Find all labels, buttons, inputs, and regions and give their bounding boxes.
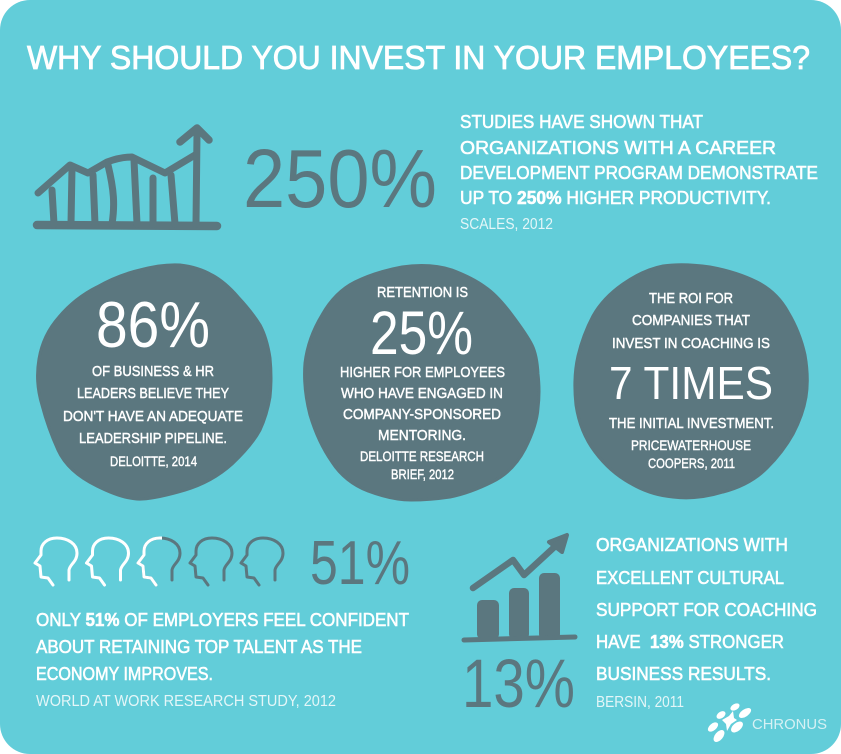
panel: 25% circle: HIGHER FOR EMPLOYEES	[340, 364, 505, 381]
text block: retaining top talent: WORLD AT WORK RESEARCH STUDY, 2012	[36, 693, 336, 710]
icon: five heads, 51% filled white	[35, 538, 283, 585]
panel: 7 times circle: PRICEWATERHOUSE	[631, 438, 751, 453]
text block: cultural support for coaching	[596, 535, 817, 711]
text block: cultural support for coaching: EXCELLENT CULTURAL	[596, 568, 784, 588]
panel: 7 times circle: THE ROI FOR	[649, 290, 733, 307]
logo: Chronus	[706, 702, 827, 744]
text block: cultural support for coaching: BUSINESS RESULTS.	[596, 664, 771, 684]
panel: 86% circle: DON'T HAVE AN ADEQUATE	[63, 408, 243, 425]
text block: cultural support for coaching: ORGANIZATIONS WITH	[596, 535, 788, 555]
title: WHY SHOULD YOU INVEST IN YOUR EMPLOYEES?	[27, 39, 810, 76]
panel: 86% circle	[38, 265, 271, 499]
text block: career development productivity: ORGANIZATIONS WITH A CAREER	[460, 138, 776, 158]
logo: Chronus: CHRONUS	[752, 716, 827, 733]
text block: cultural support for coaching: SUPPORT FOR COACHING	[596, 600, 817, 620]
text block: retaining top talent: ONLY 51% OF EMPLOYERS FEEL CONFIDENT	[36, 610, 409, 630]
panel: 7 times circle: COMPANIES THAT	[632, 312, 750, 329]
panel: 7 times circle: COOPERS, 2011	[648, 456, 735, 471]
text block: career development productivity: SCALES, 2012	[460, 216, 553, 233]
panel: 25% circle: WHO HAVE ENGAGED IN	[341, 385, 503, 402]
text block: career development productivity: STUDIES HAVE SHOWN THAT	[460, 112, 703, 132]
text block: retaining top talent: ECONOMY IMPROVES.	[36, 664, 213, 684]
text block: cultural support for coaching: BERSIN, 2011	[596, 694, 684, 711]
text block: cultural support for coaching: HAVE 13% STRONGER	[596, 632, 784, 652]
panel: 7 times circle: THE INITIAL INVESTMENT.	[609, 415, 774, 432]
panel: 25% circle: COMPANY-SPONSORED	[343, 406, 501, 423]
panel: 25% circle: DELOITTE RESEARCH	[360, 449, 484, 464]
panel: 86% circle: LEADERSHIP PIPELINE.	[79, 430, 227, 447]
stat: 250%: 250%	[243, 132, 437, 225]
panel: 7 times circle: INVEST IN COACHING IS	[612, 335, 770, 352]
text block: career development productivity: UP TO 250% HIGHER PRODUCTIVITY.	[460, 188, 771, 208]
text block: career development productivity: DEVELOPMENT PROGRAM DEMONSTRATE	[460, 163, 818, 183]
panel: 25% circle	[305, 266, 539, 500]
panel: 86% circle: DELOITTE, 2014	[110, 454, 197, 469]
panel: 7 times circle: 7 TIMES	[609, 357, 773, 409]
icon: bar chart with arrow	[464, 535, 575, 640]
stat: 51%: 51%	[310, 529, 410, 598]
panel: 25% circle: MENTORING.	[378, 427, 466, 444]
icon: rising line chart with arrow	[37, 128, 217, 226]
text block: retaining top talent: ABOUT RETAINING TOP TALENT AS THE	[36, 637, 362, 657]
panel: 25% circle: 25%	[370, 299, 473, 367]
panel: 86% circle: LEADERS BELIEVE THEY	[77, 385, 229, 402]
panel: 25% circle: RETENTION IS	[377, 284, 468, 301]
panel: 86% circle: 86%	[96, 288, 210, 361]
panel: 86% circle: OF BUSINESS & HR	[92, 363, 214, 380]
panel: 25% circle: BRIEF, 2012	[391, 467, 454, 482]
panel: 7 times circle	[575, 265, 807, 498]
text block: retaining top talent	[36, 610, 409, 710]
stat: 13%: 13%	[462, 645, 575, 722]
text block: career development productivity	[460, 112, 818, 233]
